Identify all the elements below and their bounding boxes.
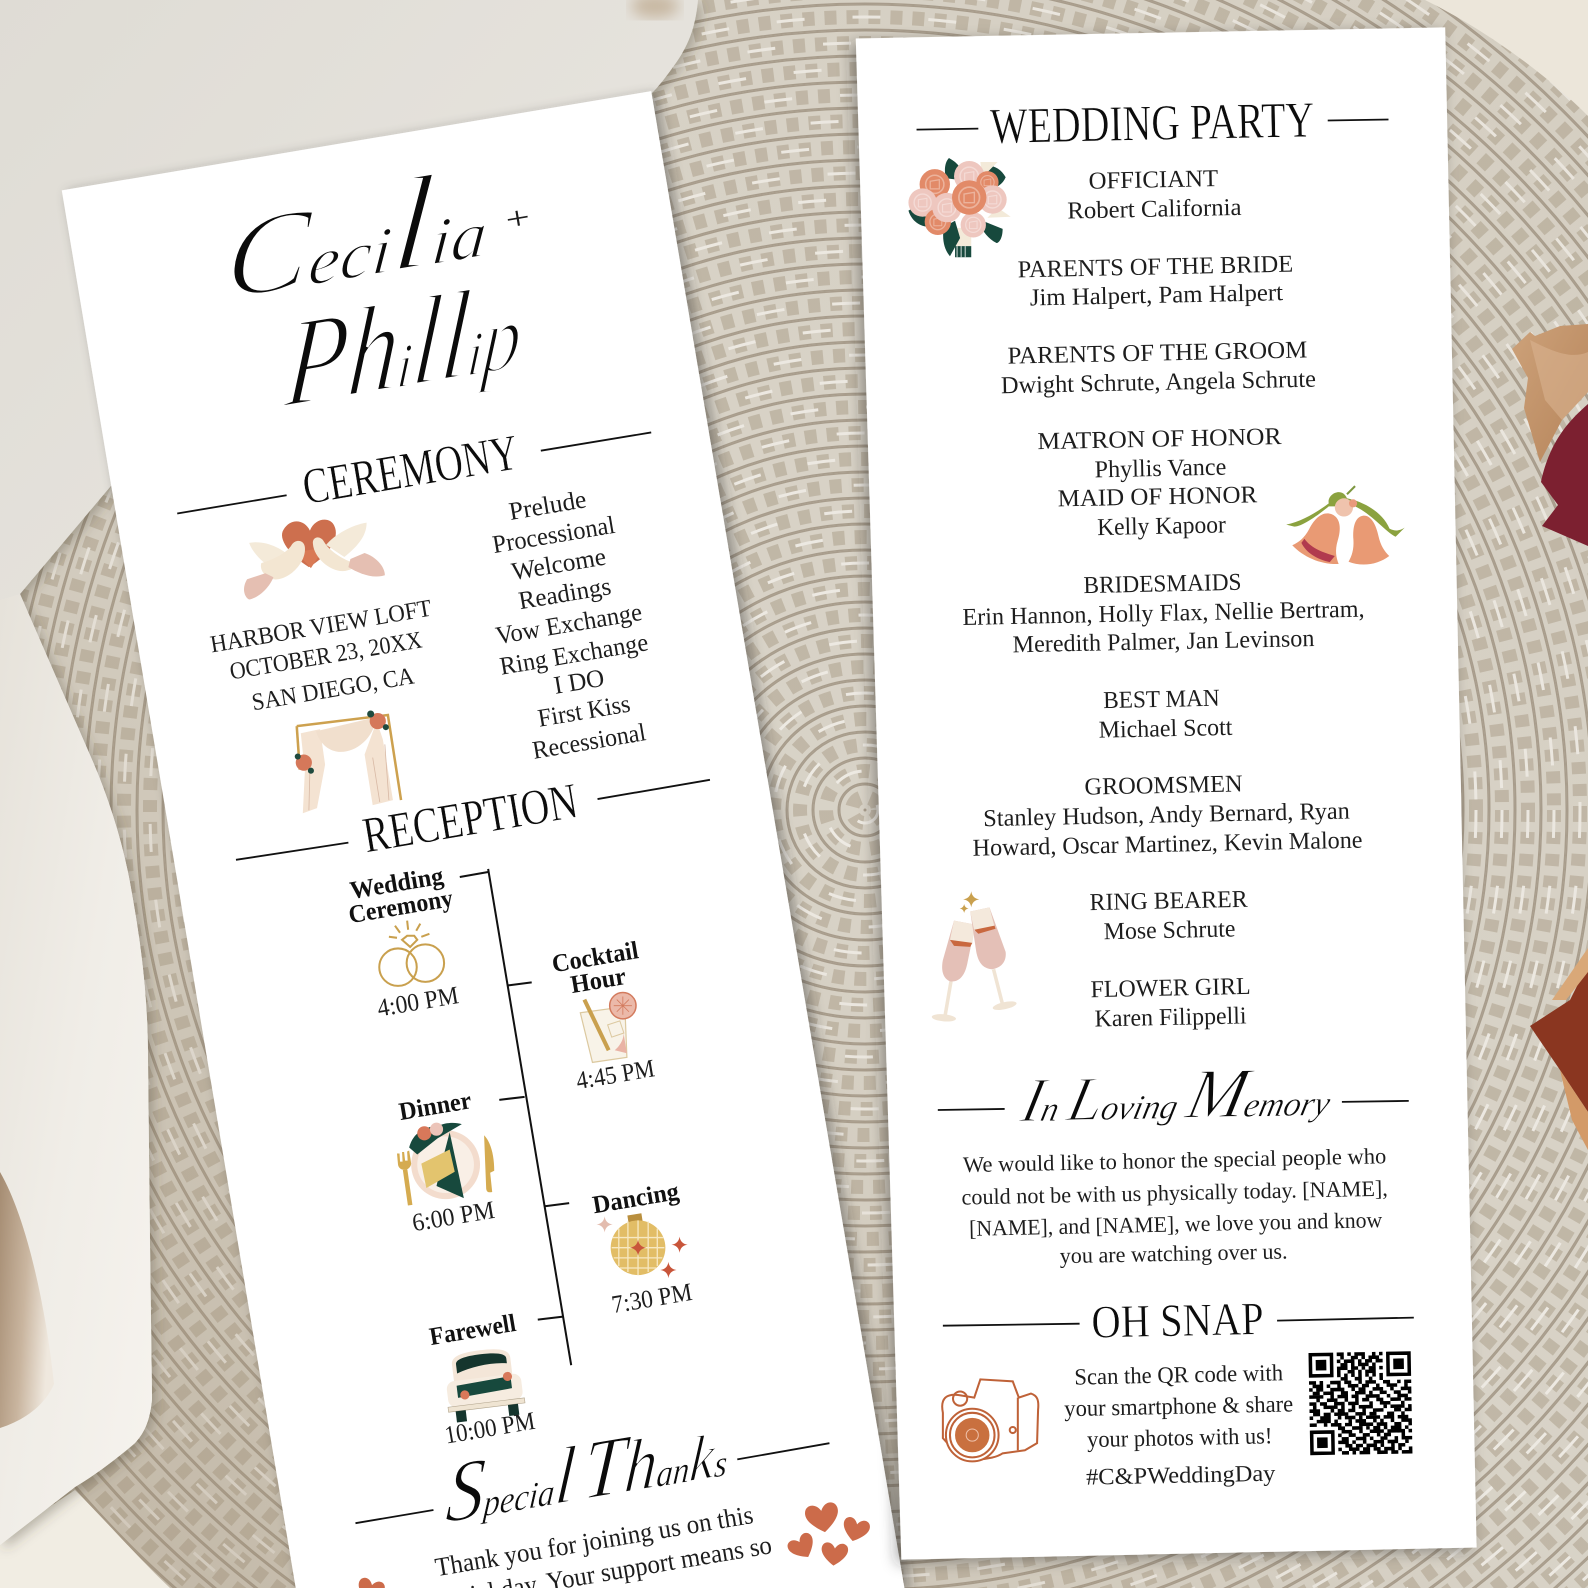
role: flower girl: FLOWER GIRL (1090, 973, 1251, 1003)
timeline item: wedding ceremony: 4:00 PM (375, 981, 461, 1022)
chart: reception timeline axis (460, 869, 571, 1365)
role: parents of the bride (1017, 251, 1293, 311)
role: flower girl (1090, 973, 1251, 1033)
icon: camera (942, 1379, 1038, 1461)
panel: left program card (62, 91, 904, 1588)
role: ring bearer: Mose Schrute (1103, 915, 1236, 945)
role: groomsmen: GROOMSMEN (1084, 770, 1243, 801)
list: order of ceremony: Recessional (530, 718, 648, 765)
list: order of ceremony: Readings (517, 572, 613, 615)
text block: venue and date: HARBOR VIEW LOFT (208, 595, 434, 658)
icon: disco ball (597, 1213, 688, 1278)
text block: memorial message: you are watching over us. (1059, 1239, 1288, 1268)
icon: bouquet (908, 158, 1011, 257)
heading: oh snap (943, 1293, 1414, 1349)
title: couple names: + (503, 199, 533, 239)
list: order of ceremony: Processional (490, 511, 617, 559)
timeline item: cocktail hour (550, 936, 657, 1095)
heading: ceremony (177, 424, 651, 515)
text block: photo sharing instructions: #C&PWeddingDay (1086, 1461, 1276, 1491)
list: order of ceremony: First Kiss (536, 690, 632, 733)
icon: scattered hearts (355, 1501, 871, 1588)
background: autumn leaves (1512, 324, 1588, 1150)
text block: venue and date: SAN DIEGO, CA (250, 662, 417, 716)
timeline item: cocktail hour: Hour (568, 962, 628, 999)
role: best man: Michael Scott (1098, 714, 1233, 744)
role: parents of the bride: PARENTS OF THE BRIDE (1017, 251, 1293, 283)
heading: reception: RECEPTION (359, 772, 582, 863)
role: best man: BEST MAN (1103, 685, 1220, 714)
role: parents of the groom (1001, 336, 1316, 399)
role: bridesmaids: Erin Hannon, Holly Flax, Nellie Bertram, (962, 596, 1365, 631)
list: order of ceremony: I DO (552, 664, 606, 700)
role: officiant: OFFICIANT (1088, 165, 1219, 195)
heading: special thanks: Special Thanks (443, 1397, 732, 1542)
role: parents of the bride: Jim Halpert, Pam Halpert (1030, 279, 1284, 311)
role: officiant (1067, 165, 1242, 225)
heading: oh snap: OH SNAP (1091, 1293, 1264, 1349)
text block: memorial message: could not be with us physically today. [NAME], (961, 1176, 1388, 1210)
timeline item: wedding ceremony: Wedding (348, 862, 446, 905)
timeline item: wedding ceremony: Ceremony (346, 884, 455, 929)
role: ring bearer (1089, 886, 1249, 945)
role: officiant: Robert California (1067, 194, 1242, 225)
role: parents of the groom: Dwight Schrute, Angela Schrute (1001, 366, 1316, 399)
list: order of ceremony: Vow Exchange (494, 598, 644, 650)
icon: dinner place setting (397, 1123, 494, 1205)
title: couple names: Phillip (280, 255, 528, 435)
role: ring bearer: RING BEARER (1089, 886, 1249, 916)
heading: reception (236, 772, 710, 863)
role: best man (1098, 685, 1233, 744)
role: groomsmen: Stanley Hudson, Andy Bernard, Ryan (983, 798, 1350, 832)
role: bridesmaids (962, 569, 1365, 658)
icon: wedding bells (1286, 486, 1405, 569)
timeline item: dancing (590, 1177, 694, 1319)
role: matron and maid of honor (1037, 423, 1283, 541)
heading: ceremony: CEREMONY (298, 424, 522, 515)
icon: getaway car (442, 1346, 526, 1423)
role: bridesmaids: Meredith Palmer, Jan Levinson (1012, 625, 1315, 658)
timeline item: farewell: 10:00 PM (443, 1407, 537, 1450)
icon: cocktail (580, 993, 636, 1062)
heading: wedding party: WEDDING PARTY (990, 91, 1315, 154)
text block: memorial message: [NAME], and [NAME], we love you and know (969, 1207, 1382, 1241)
role: parents of the groom: PARENTS OF THE GROOM (1007, 336, 1308, 370)
role: matron and maid of honor: MAID OF HONOR (1057, 481, 1258, 512)
list: order of ceremony: Welcome (509, 543, 608, 586)
icon: champagne flutes (931, 891, 1017, 1022)
timeline item: dancing: 7:30 PM (610, 1278, 694, 1319)
text block: thank you message: Thank you for joining us on this (433, 1500, 755, 1582)
timeline item: dinner: Dinner (397, 1086, 473, 1126)
text block: memorial message: We would like to honor the special people who (963, 1143, 1387, 1177)
list: order of ceremony (490, 485, 650, 765)
text block: venue and date: OCTOBER 23, 20XX (228, 626, 424, 685)
timeline item: dancing: Dancing (590, 1177, 681, 1219)
text block: photo sharing instructions: your photos with us! (1087, 1423, 1273, 1453)
text block: venue and date (208, 595, 434, 716)
role: bridesmaids: BRIDESMAIDS (1083, 569, 1242, 599)
panel: right program card (856, 27, 1477, 1560)
role: groomsmen (972, 770, 1363, 862)
role: matron and maid of honor: MATRON OF HONOR (1037, 423, 1283, 455)
text block: photo sharing instructions: Scan the QR code with (1074, 1360, 1284, 1391)
timeline item: farewell: Farewell (427, 1309, 518, 1351)
timeline item: dinner: 6:00 PM (410, 1196, 497, 1237)
timeline item: cocktail hour: 4:45 PM (574, 1054, 657, 1095)
icon: QR code (1309, 1353, 1412, 1453)
title: couple names (221, 138, 533, 435)
timeline item: wedding ceremony (346, 862, 461, 1022)
heading: in loving memory: In Loving Memory (1014, 1051, 1342, 1137)
timeline item: farewell (427, 1309, 537, 1450)
text block: memorial message (961, 1143, 1388, 1268)
role: matron and maid of honor: Kelly Kapoor (1097, 511, 1226, 541)
role: flower girl: Karen Filippelli (1094, 1002, 1247, 1033)
timeline item: dinner (397, 1086, 497, 1237)
icon: doves with heart (244, 520, 385, 600)
list: order of ceremony: Prelude (507, 485, 588, 526)
heading: special thanks (355, 1397, 829, 1542)
title: couple names: Cecilia (221, 138, 494, 329)
timeline item: cocktail hour: Cocktail (550, 936, 640, 978)
role: matron and maid of honor: Phyllis Vance (1094, 454, 1227, 483)
icon: wedding rings (379, 921, 444, 986)
text block: photo sharing instructions (1064, 1360, 1293, 1491)
list: order of ceremony: Ring Exchange (498, 628, 650, 681)
role: groomsmen: Howard, Oscar Martinez, Kevin Malone (972, 827, 1363, 862)
background: linen cloth (0, 0, 698, 1545)
icon: floral arch (295, 710, 401, 813)
text block: photo sharing instructions: your smartphone & share (1064, 1391, 1293, 1422)
